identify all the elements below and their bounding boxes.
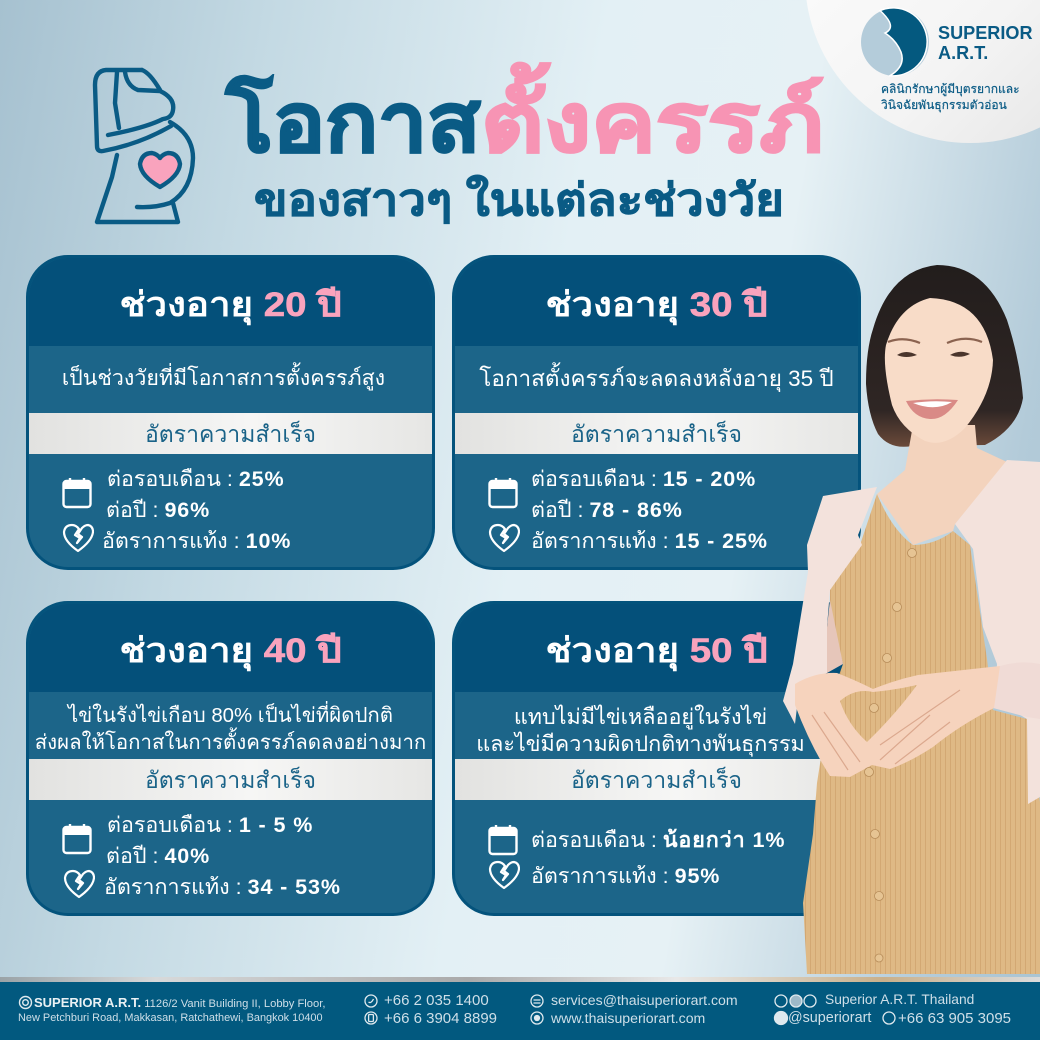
stat: miscarriage: อัตราการแท้ง : 95% [531, 864, 720, 888]
finger lines [812, 690, 960, 770]
logo badge [805, 0, 1040, 143]
stat: per year: ต่อปี : 96% [106, 498, 210, 522]
address: New Petchburi Road, Makkasan, Ratchathewi, Bangkok 10400 [18, 1012, 323, 1024]
icon: broken heart [64, 870, 95, 898]
icon: pin [18, 996, 32, 1010]
description: ไข่ในรังไข่เกือบ 80% เป็นไข่ที่ผิดปกติ [68, 705, 393, 727]
social: @superiorart [788, 1010, 871, 1026]
left cardigan [783, 487, 877, 724]
stat: per cycle: ต่อรอบเดือน : น้อยกว่า 1% [531, 828, 785, 852]
icon: calendar [488, 825, 518, 856]
heading: age 30: ช่วงอายุ 30 ปี [545, 286, 768, 324]
description: โอกาสตั้งครรภ์จะลดลงหลังอายุ 35 ปี [479, 366, 834, 391]
social: Superior A.R.T. Thailand [825, 992, 974, 1007]
phones [364, 992, 497, 1027]
web: www.thaisuperiorart.com [551, 1010, 705, 1026]
icon: calendar [62, 478, 92, 508]
panel: age 40 [26, 601, 435, 916]
bar label: อัตราความสำเร็จ [145, 421, 316, 447]
stat: per cycle: ต่อรอบเดือน : 1 - 5 % [107, 813, 313, 837]
subtitle: ของสาวๆ ในแต่ละช่วงวัย [254, 176, 784, 225]
logo name: SUPERIOR [938, 23, 1033, 43]
heading: age 20: ช่วงอายุ 20 ปี [119, 286, 342, 324]
buttons [864, 548, 916, 962]
stat: miscarriage: อัตราการแท้ง : 34 - 53% [104, 875, 341, 899]
bar label: อัตราความสำเร็จ [571, 767, 742, 793]
stat: miscarriage: อัตราการแท้ง : 10% [102, 529, 291, 553]
icon: pregnant woman [92, 68, 196, 224]
icon: broken heart [488, 524, 520, 552]
icon: calendar [488, 478, 518, 508]
title: ตั้งครรภ์ [481, 78, 824, 169]
hair back [866, 265, 1023, 447]
web [530, 992, 738, 1026]
logo tagline: วินิจฉัยพันธุกรรมตัวอ่อน [881, 98, 1007, 112]
icon: broken heart [488, 860, 520, 890]
eyes and mouth [888, 339, 982, 419]
logo name [938, 23, 1033, 63]
heading: age 40: ช่วงอายุ 40 ปี [119, 632, 342, 670]
title [224, 62, 824, 169]
address [18, 995, 325, 1024]
title: โอกาส [226, 78, 480, 169]
silver strip [0, 977, 1040, 982]
heading: age 50: ช่วงอายุ 50 ปี [545, 632, 768, 670]
description [35, 701, 426, 754]
stat: per cycle: ต่อรอบเดือน : 25% [107, 467, 285, 491]
web: services@thaisuperiorart.com [551, 992, 738, 1008]
logo tagline [881, 82, 1020, 112]
dress [803, 494, 1040, 974]
social [774, 992, 1011, 1027]
icon: broken heart [62, 524, 94, 552]
phones: +66 2 035 1400 [384, 992, 489, 1009]
heart gap [840, 685, 917, 742]
stat: per year: ต่อปี : 40% [106, 844, 210, 868]
right sleeve [993, 662, 1040, 719]
logo name: A.R.T. [938, 43, 988, 63]
footer [0, 977, 1040, 1040]
description [476, 704, 805, 757]
neck and chest [877, 425, 1007, 545]
description: แทบไม่มีไข่เหลืออยู่ในรังไข่ [514, 704, 767, 729]
address: SUPERIOR A.R.T. 1126/2 Vanit Building II, Lobby Floor, [34, 995, 325, 1010]
logo mark [861, 8, 929, 76]
panel: age 20 [26, 255, 435, 570]
stat: per cycle: ต่อรอบเดือน : 15 - 20% [531, 467, 756, 491]
description: และไข่มีความผิดปกติทางพันธุกรรม [476, 731, 805, 756]
phones: +66 6 3904 8899 [384, 1010, 497, 1027]
logo tagline: คลินิกรักษาผู้มีบุตรยากและ [881, 82, 1020, 96]
description: เป็นช่วงวัยที่มีโอกาสการตั้งครรภ์สูง [62, 366, 385, 390]
social: +66 63 905 3095 [898, 1010, 1011, 1027]
icon: calendar [62, 824, 92, 854]
stat: per year: ต่อปี : 78 - 86% [531, 498, 683, 522]
cardigan inner shade [827, 600, 843, 673]
right cardigan [955, 460, 1040, 804]
panel: age 50 [452, 601, 843, 916]
description: ส่งผลให้โอกาสในการตั้งครรภ์ลดลงอย่างมาก [35, 732, 426, 754]
hands [795, 666, 1000, 777]
stat: miscarriage: อัตราการแท้ง : 15 - 25% [531, 529, 768, 553]
bar label: อัตราความสำเร็จ [571, 421, 742, 447]
panel: age 30 [452, 255, 861, 570]
face [885, 298, 993, 443]
bar label: อัตราความสำเร็จ [145, 767, 316, 793]
